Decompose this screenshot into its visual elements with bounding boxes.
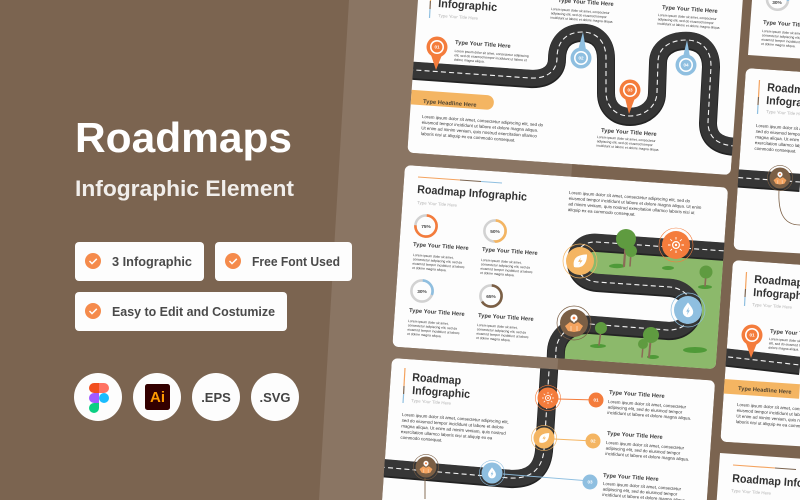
headline band bbox=[723, 379, 800, 399]
pin 01 bbox=[742, 324, 762, 358]
pin 01: 01 bbox=[749, 333, 755, 338]
icon: SVG bbox=[251, 373, 299, 421]
heading bbox=[766, 82, 800, 111]
gauge text 2: Lorem ipsum dolor sit amet, bbox=[481, 258, 522, 265]
body text: magna aliqua. Ut enim ad minim veniam, quis nostrud bbox=[401, 423, 506, 436]
body text: sed do eiusmod tempor incididunt ut labore et dolore bbox=[402, 418, 504, 430]
list item 01: adipiscing elit, sed do eiusmod tempor bbox=[608, 404, 683, 415]
subtitle: Infographic Element bbox=[75, 176, 295, 201]
panel: cropped slide top right bbox=[748, 0, 800, 58]
icon: location on map bbox=[767, 165, 793, 191]
pin 02: 02 bbox=[578, 56, 584, 61]
body text: Lorem ipsum dolor sit amet, consectetur adipiscing elit, bbox=[402, 412, 509, 424]
pin 02 bbox=[570, 32, 592, 68]
text block 02: incididunt ut labore et dolore magna aliqua. bbox=[550, 16, 614, 24]
gauge text 1: consectetur adipiscing elit, sed do bbox=[413, 257, 462, 265]
feature badge: Easy to Edit and Costumize: Easy to Edit and Costumize bbox=[112, 304, 275, 319]
body text: exercitation ullamco laboris nisi ut aliquip ex ea bbox=[401, 429, 493, 440]
pin 04: 04 bbox=[683, 63, 689, 68]
subheading: Type Your Title Here bbox=[752, 302, 793, 310]
pin 03 bbox=[620, 80, 640, 114]
gauge text 2: et dolore magna aliqua. bbox=[480, 271, 515, 277]
heading: Roadmap Infographic bbox=[417, 184, 528, 204]
icon: Figma bbox=[74, 373, 122, 421]
headline pill: Type Headline Here bbox=[423, 99, 477, 109]
green landscape bbox=[558, 252, 724, 369]
text block 02: adipiscing elit, sed do eiusmod tempor bbox=[551, 11, 608, 19]
gauge text 2 bbox=[480, 247, 538, 279]
text block 01: Lorem ipsum dolor sit amet, consectetur adipiscing bbox=[454, 49, 529, 58]
item text bbox=[761, 20, 800, 50]
accent line bbox=[733, 465, 796, 470]
feature badge: 3 Infographic: 3 Infographic bbox=[112, 254, 192, 269]
panel: cropped slide right middle bbox=[730, 68, 800, 253]
headline pill bbox=[410, 90, 494, 110]
text block 01: elit, sed do eiusmod tempor incididunt ut labore et bbox=[454, 53, 527, 62]
list item 02 bbox=[605, 431, 690, 462]
icon: location on map bbox=[413, 454, 439, 480]
list item 03: adipiscing elit, sed do eiusmod tempor bbox=[603, 486, 678, 497]
list item 01 bbox=[607, 390, 692, 421]
text block 01: dolore magna aliqua. bbox=[454, 58, 485, 64]
text block 04: Type Your Title Here bbox=[662, 5, 718, 15]
pin 04 bbox=[676, 40, 696, 76]
text block 03: Lorem ipsum dolor sit amet, consectetur bbox=[597, 135, 657, 143]
feature badge: Free Font Used: Free Font Used bbox=[252, 254, 340, 269]
gauge 65% bbox=[480, 285, 502, 307]
text block 04: adipiscing elit, sed do eiusmod tempor bbox=[658, 17, 715, 25]
pin 03: 03 bbox=[627, 88, 633, 93]
body text: Lorem ipsum dolor sit amet, consectetur adipiscing elit, sed do bbox=[422, 114, 544, 127]
accent bar bbox=[758, 80, 760, 114]
gauge 30%: 30% bbox=[417, 289, 428, 295]
list item 02: Lorem ipsum dolor sit amet, consectetur bbox=[606, 440, 685, 450]
text block 02: Lorem ipsum dolor sit amet, consectetur bbox=[551, 7, 611, 15]
headline band: Type Headline Here bbox=[738, 386, 792, 396]
heading bbox=[753, 274, 800, 303]
road bbox=[555, 242, 740, 376]
body text: aliquip ex ea commodo consequat. bbox=[568, 207, 636, 217]
gauge text 3 bbox=[407, 308, 465, 340]
panel: slide 3 road with numbered list bbox=[380, 355, 715, 500]
connector lines bbox=[425, 399, 596, 499]
gauge 30% bbox=[411, 280, 433, 302]
number 01 bbox=[588, 392, 604, 408]
item text: dolore magna aliqua. bbox=[768, 346, 799, 352]
left panel: product title and features bbox=[74, 114, 352, 421]
road bbox=[380, 355, 550, 479]
subheading: Type Your Title Here bbox=[731, 488, 772, 496]
gauge text 4 bbox=[476, 313, 534, 344]
accent bar bbox=[403, 368, 405, 403]
gauge 50%: 50% bbox=[490, 229, 501, 235]
body text: eiusmod tempor incididunt ut labore et dolore magna aliqua. Ut enim bbox=[569, 196, 702, 210]
icon: Adobe Illustrator bbox=[133, 373, 181, 421]
body text: laboris nisi ut aliquip ex ea commodo consequat. bbox=[421, 131, 516, 143]
list item 03: Lorem ipsum dolor sit amet, consectetur bbox=[603, 481, 682, 491]
gauge text 4: et dolore magna aliqua. bbox=[476, 336, 511, 342]
list item 03: Type Your Title Here bbox=[603, 473, 659, 483]
text block 03 bbox=[596, 128, 660, 152]
body text: ad minim veniam, quis nostrud exercitation ullamco laboris nisi ut bbox=[568, 201, 695, 215]
number 02 bbox=[586, 434, 600, 448]
road bbox=[720, 356, 800, 366]
gauge text 3: Type Your Title Here bbox=[409, 308, 465, 318]
number 01: 01 bbox=[593, 398, 599, 403]
gauge text 3: eiusmod tempor incididunt ut labore bbox=[407, 328, 460, 335]
body text: Ut enim ad minim veniam, quis nostrud exercitation ullamco bbox=[421, 125, 538, 138]
panel: cropped slide right lower bbox=[720, 260, 800, 446]
text block 01 bbox=[454, 40, 528, 63]
gauge text 3: et dolore magna aliqua. bbox=[407, 332, 442, 338]
list item 02: Type Your Title Here bbox=[607, 431, 663, 441]
gauge text 3: consectetur adipiscing elit, sed do bbox=[408, 323, 457, 331]
list item 01: Type Your Title Here bbox=[609, 390, 665, 400]
body text: commodo consequat. bbox=[754, 146, 797, 154]
gauge text 2: eiusmod tempor incididunt ut labore bbox=[480, 267, 533, 274]
subheading: Type Your Title Here bbox=[417, 200, 458, 208]
accent bar bbox=[430, 0, 431, 18]
gauge text 1: eiusmod tempor incididunt ut labore bbox=[412, 262, 465, 269]
panel: cropped slide bottom right bbox=[717, 453, 800, 500]
subheading: Type Your Title Here bbox=[438, 13, 479, 21]
feature badge: 3 Infographic bbox=[75, 242, 204, 281]
icon: sun bbox=[659, 228, 693, 262]
heading: Roadmap bbox=[412, 372, 462, 387]
gauge 65%: 65% bbox=[486, 294, 497, 300]
list item 01: incididunt ut labore et dolore magna aliqua. bbox=[607, 410, 691, 421]
gauge text 4: eiusmod tempor incididunt ut labore bbox=[476, 332, 529, 339]
text block 03: incididunt ut labore et dolore magna aliqua. bbox=[596, 144, 660, 152]
gauge 50% bbox=[484, 220, 506, 242]
background: lighter diagonal band bbox=[319, 0, 584, 500]
gauge 75% bbox=[415, 215, 437, 237]
panel: slide 2 road with landscape bbox=[392, 165, 745, 376]
feature badge: Easy to Edit and Costumize bbox=[75, 292, 287, 331]
number 02: 02 bbox=[590, 439, 596, 444]
accent bar bbox=[744, 272, 746, 306]
gauge text 4: Lorem ipsum dolor sit amet, bbox=[477, 323, 518, 330]
text block 04: Lorem ipsum dolor sit amet, consectetur bbox=[658, 13, 718, 21]
icon: sun bbox=[535, 385, 561, 411]
list item 02: adipiscing elit, sed do eiusmod tempor bbox=[606, 445, 681, 456]
icon: EPS: .EPS bbox=[201, 390, 231, 405]
road bbox=[730, 177, 800, 183]
icon: location on map bbox=[557, 306, 591, 340]
icon: EPS bbox=[192, 373, 240, 421]
panel: slide 1 winding road bbox=[380, 0, 744, 175]
gauge 75%: 75% bbox=[421, 224, 432, 230]
icon: leaf bbox=[563, 244, 597, 278]
body text: commodo consequat. bbox=[400, 435, 443, 443]
text block 03: adipiscing elit, sed do eiusmod tempor bbox=[597, 139, 654, 147]
icon: Adobe Illustrator: Ai bbox=[150, 389, 165, 406]
heading bbox=[412, 373, 470, 399]
item text: et dolore magna aliqua. bbox=[761, 42, 796, 48]
text block 04 bbox=[657, 5, 721, 30]
title: Roadmaps bbox=[75, 114, 292, 161]
gauge text 2: consectetur adipiscing elit, sed do bbox=[481, 262, 530, 270]
text block 01: Type Your Title Here bbox=[455, 40, 511, 50]
connector line bbox=[779, 190, 800, 225]
gauge text 1 bbox=[412, 242, 469, 274]
trees bbox=[590, 229, 712, 359]
text block 02 bbox=[550, 0, 614, 24]
gauge text 4: consectetur adipiscing elit, sed do bbox=[477, 327, 526, 335]
list item 01: Lorem ipsum dolor sit amet, consectetur bbox=[608, 399, 687, 409]
gauge text 2: Type Your Title Here bbox=[482, 247, 538, 257]
subheading: Type Your Title Here bbox=[411, 398, 452, 406]
gauge 30%: 30% bbox=[772, 0, 783, 6]
feature badge: Free Font Used bbox=[215, 242, 352, 281]
number 03: 03 bbox=[587, 480, 593, 485]
item text bbox=[768, 329, 800, 352]
list item 02: incididunt ut labore et dolore magna aliqua. bbox=[605, 451, 689, 462]
icon: water drop bbox=[479, 460, 505, 486]
number 03 bbox=[582, 474, 598, 490]
pin 01: 01 bbox=[434, 45, 440, 50]
icon: leaf bbox=[531, 425, 557, 451]
text block 03: Type Your Title Here bbox=[601, 128, 657, 138]
list item 03 bbox=[602, 473, 687, 500]
gauge text 1: Type Your Title Here bbox=[413, 242, 469, 252]
gauge text 1: et dolore magna aliqua. bbox=[412, 266, 447, 272]
heading: Infographic bbox=[412, 385, 471, 401]
icon: SVG: .SVG bbox=[259, 390, 291, 405]
pin 01 bbox=[426, 36, 448, 70]
gauge text 4: Type Your Title Here bbox=[478, 313, 534, 323]
body text: Lorem ipsum dolor sit amet, consectetur adipiscing elit, sed do bbox=[569, 190, 691, 203]
text block 04: incididunt ut labore et dolore magna aliqua. bbox=[657, 22, 721, 30]
body text: eiusmod tempor incididunt ut labore et dolore magna aliqua. bbox=[422, 120, 538, 133]
icon: water drop bbox=[671, 293, 705, 327]
accent line bbox=[418, 177, 502, 183]
road bbox=[400, 32, 735, 147]
gauge text 1: Lorem ipsum dolor sit amet, bbox=[413, 253, 454, 260]
gauge text 3: Lorem ipsum dolor sit amet, bbox=[408, 319, 449, 326]
